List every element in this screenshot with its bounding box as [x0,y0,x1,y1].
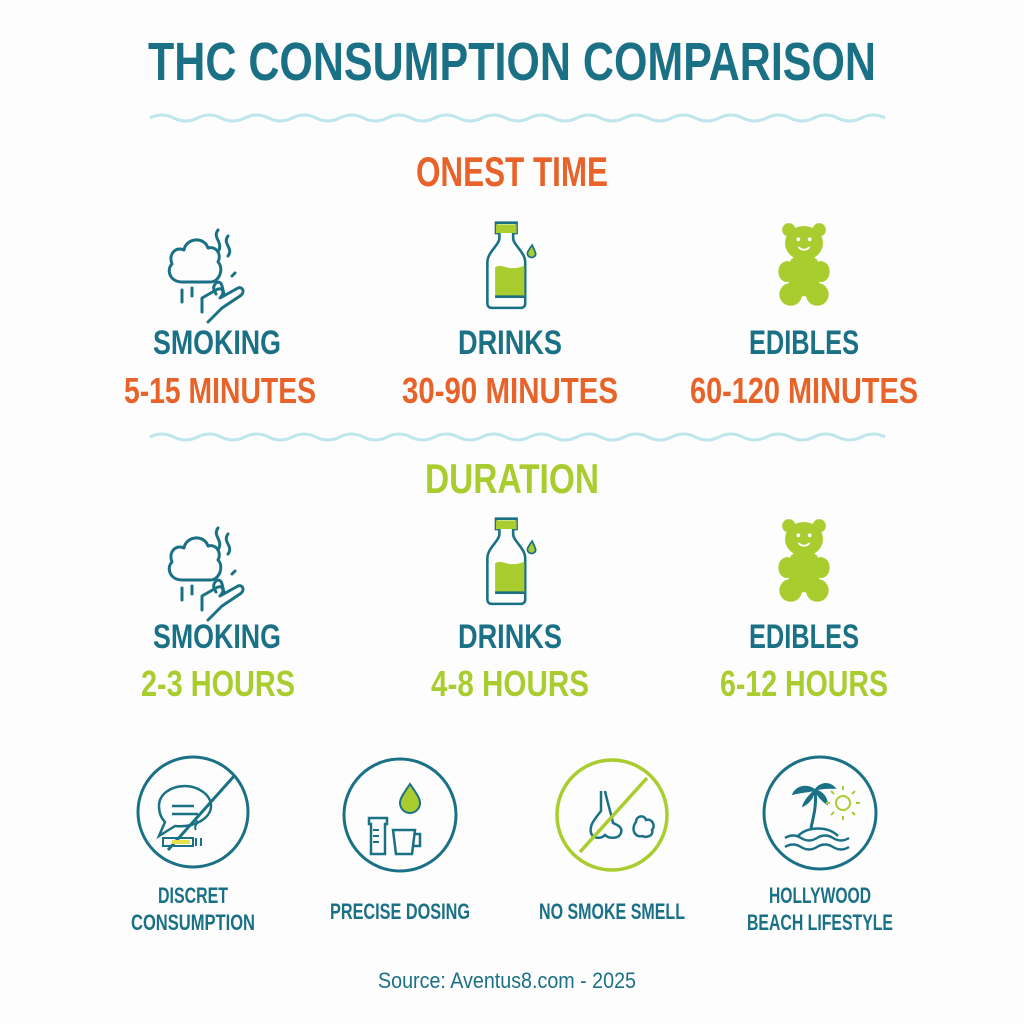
icon: drinks onset [487,223,536,308]
feature labels: BEACH LIFESTYLE [747,910,893,935]
feature labels [131,883,893,935]
duration labels: SMOKING [153,618,281,656]
feature labels: CONSUMPTION [131,910,255,935]
feature labels: DISCRET [158,883,228,908]
icon: smoking onset [169,230,243,322]
icon: edibles onset [778,223,830,306]
icon: precise dosing [344,759,456,871]
duration labels: 4-8 HOURS [431,663,589,704]
duration labels: 2-3 HOURS [141,663,295,704]
feature labels: NO SMOKE SMELL [539,899,685,924]
source: Source: Aventus8.com - 2025 [378,968,636,993]
onset labels: EDIBLES [749,324,859,362]
onset labels: DRINKS [458,324,562,362]
onset labels: 30-90 MINUTES [402,370,618,411]
icon: discreet consumption [138,757,248,867]
duration labels: 6-12 HOURS [720,663,888,704]
icon: no smoke smell [557,760,667,870]
duration labels: EDIBLES [749,618,859,656]
feature labels: HOLLYWOOD [769,883,871,908]
onset labels: SMOKING [153,324,281,362]
heading: onset time: ONEST TIME [416,148,608,195]
icon: edibles duration [778,519,830,602]
onset labels [124,324,918,411]
icon: drinks duration [487,519,536,604]
onset labels: 60-120 MINUTES [690,370,918,411]
onset labels: 5-15 MINUTES [124,370,316,411]
heading: duration: DURATION [425,455,599,502]
feature labels: PRECISE DOSING [330,899,470,924]
icon: smoking duration [169,528,243,620]
duration labels [141,618,888,704]
duration labels: DRINKS [458,618,562,656]
icon: beach lifestyle [764,757,876,869]
